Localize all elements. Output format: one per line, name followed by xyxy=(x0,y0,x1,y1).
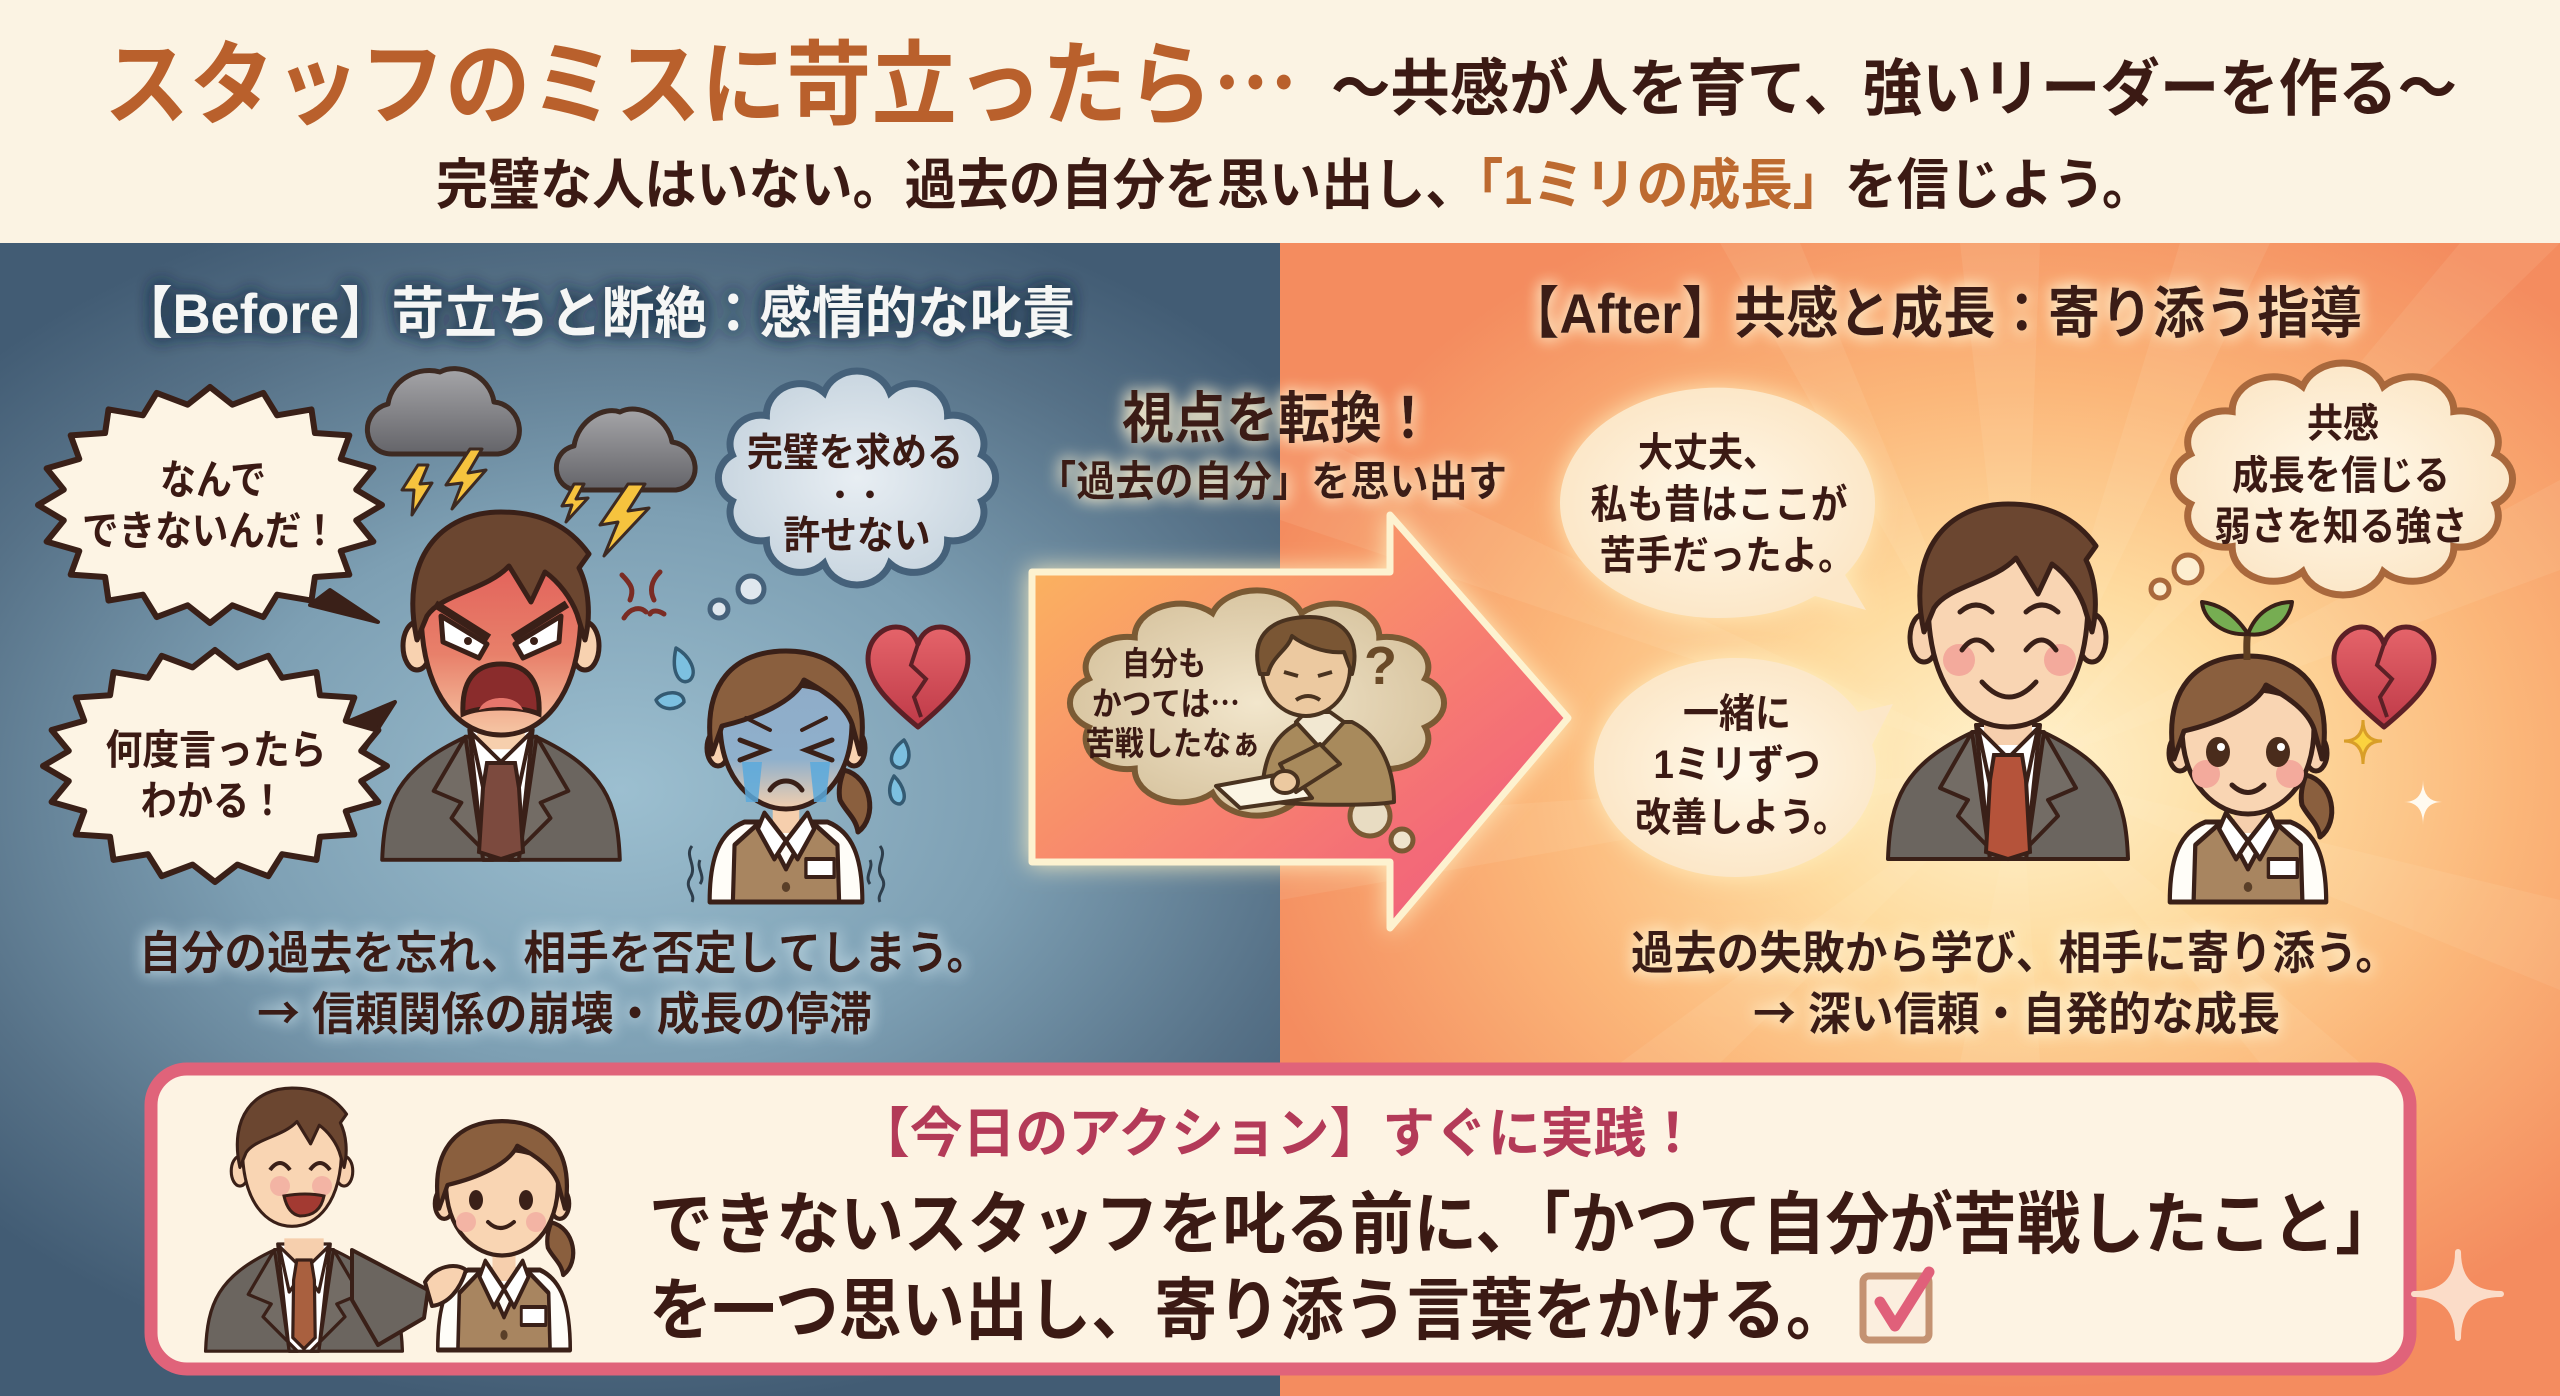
after caption: 過去の失敗から学び、相手に寄り添う。 xyxy=(1631,927,2398,979)
speech burst: なんで: なんで xyxy=(160,457,266,503)
thought cloud: past self: かつては… xyxy=(1092,677,1240,725)
icon: broken heart xyxy=(868,627,968,727)
thought cloud: 共感: 弱さを知る強さ xyxy=(2214,505,2468,549)
icon: broken heart mending xyxy=(2334,627,2434,727)
speech bubble: 一緒に: 1ミリずつ xyxy=(1654,743,1820,787)
speech bubble: 一緒に: 改善しよう。 xyxy=(1635,796,1849,840)
speech burst: なんで: できないんだ！ xyxy=(82,508,338,554)
thought cloud: 共感: 共感 xyxy=(2307,402,2379,446)
transition heading: 「過去の自分」を思い出す xyxy=(1037,458,1507,505)
thought cloud: 完璧を求める: 許せない xyxy=(784,515,930,558)
thought cloud: 完璧を求める: 完璧を求める xyxy=(747,432,963,475)
panel: today's action: を一つ思い出し、寄り添う言葉をかける。 xyxy=(649,1273,1849,1349)
before heading: 【Before】苛立ちと断絶：感情的な叱責 xyxy=(120,282,1075,345)
icon: anger mark xyxy=(622,572,664,618)
light rays xyxy=(1280,243,2560,1063)
panel: before xyxy=(0,243,1280,1396)
icon: storm cloud left xyxy=(367,369,519,515)
action body: できないスタッフを叱る前に、「かつて自分が苦戦したこと」 xyxy=(649,1187,2399,1263)
thought cloud: past self: 自分も xyxy=(1122,645,1206,682)
after caption: → 深い信頼・自発的な成長 xyxy=(1753,978,2280,1044)
action heading: 【今日のアクション】すぐに実践！ xyxy=(857,1104,1699,1164)
speech burst: なんで xyxy=(38,387,382,623)
center transition xyxy=(1032,387,1568,928)
before caption xyxy=(139,927,989,1044)
speech bubble: 大丈夫: 大丈夫、 xyxy=(1638,431,1778,475)
character: young self writing xyxy=(1216,617,1394,808)
character: angry manager xyxy=(382,512,620,860)
character: crying staff xyxy=(688,651,884,902)
speech bubble: 大丈夫: 私も昔はここが xyxy=(1590,483,1848,527)
speech bubble: 大丈夫 xyxy=(1560,388,1875,618)
character: smiling manager xyxy=(1888,504,2128,859)
thought cloud: 完璧を求める: ・・ xyxy=(825,480,885,513)
illustration: manager encouraging staff xyxy=(206,1088,573,1351)
panel: today's action xyxy=(151,1069,2410,1369)
icon: sprout xyxy=(2202,602,2292,660)
before caption: → 信頼関係の崩壊・成長の停滞 xyxy=(257,978,872,1044)
icon: checkbox xyxy=(1863,1272,1929,1340)
icon: sweat drops xyxy=(656,648,909,804)
header band xyxy=(0,0,2560,243)
subtitle: ～共感が人を育て、強いリーダーを作る～ xyxy=(1331,55,2457,124)
character: smiling staff with sprout xyxy=(2169,602,2332,902)
speech burst: 何度言ったら: わかる！ xyxy=(140,778,286,824)
transition heading xyxy=(1037,387,1507,505)
thought cloud: past self: 苦戦したなぁ xyxy=(1086,725,1260,762)
icon: storm cloud right xyxy=(556,409,695,556)
after heading: 【After】共感と成長：寄り添う指導 xyxy=(1507,282,2362,345)
before caption: 自分の過去を忘れ、相手を否定してしまう。 xyxy=(139,927,989,979)
speech burst: 何度言ったら: 何度言ったら xyxy=(106,727,326,773)
speech burst: 何度言ったら xyxy=(43,650,395,882)
thought cloud: 共感 xyxy=(2151,363,2513,598)
speech bubble: 一緒に xyxy=(1594,658,1893,877)
thought cloud: 完璧を求める xyxy=(710,371,996,618)
icon: white sparkle xyxy=(2404,780,2442,825)
arrow xyxy=(1032,515,1568,928)
thought cloud: past self xyxy=(1070,590,1444,851)
icon: question mark: ? xyxy=(1364,636,1397,696)
panel: after xyxy=(1280,243,2560,1396)
speech bubble: 大丈夫: 苦手だったよ。 xyxy=(1600,534,1854,578)
thought cloud: 共感: 成長を信じる xyxy=(2232,454,2450,498)
speech bubble: 一緒に: 一緒に xyxy=(1683,692,1791,736)
transition heading: 視点を転換！ xyxy=(1122,387,1434,450)
tagline: 完璧な人はいない。過去の自分を思い出し、「1ミリの成長」を信じよう。 xyxy=(436,154,2154,216)
after caption xyxy=(1631,927,2398,1044)
icon: yellow sparkle xyxy=(2344,720,2382,764)
icon: corner sparkle xyxy=(2414,1252,2501,1338)
title: スタッフのミスに苛立ったら… xyxy=(104,11,1298,144)
